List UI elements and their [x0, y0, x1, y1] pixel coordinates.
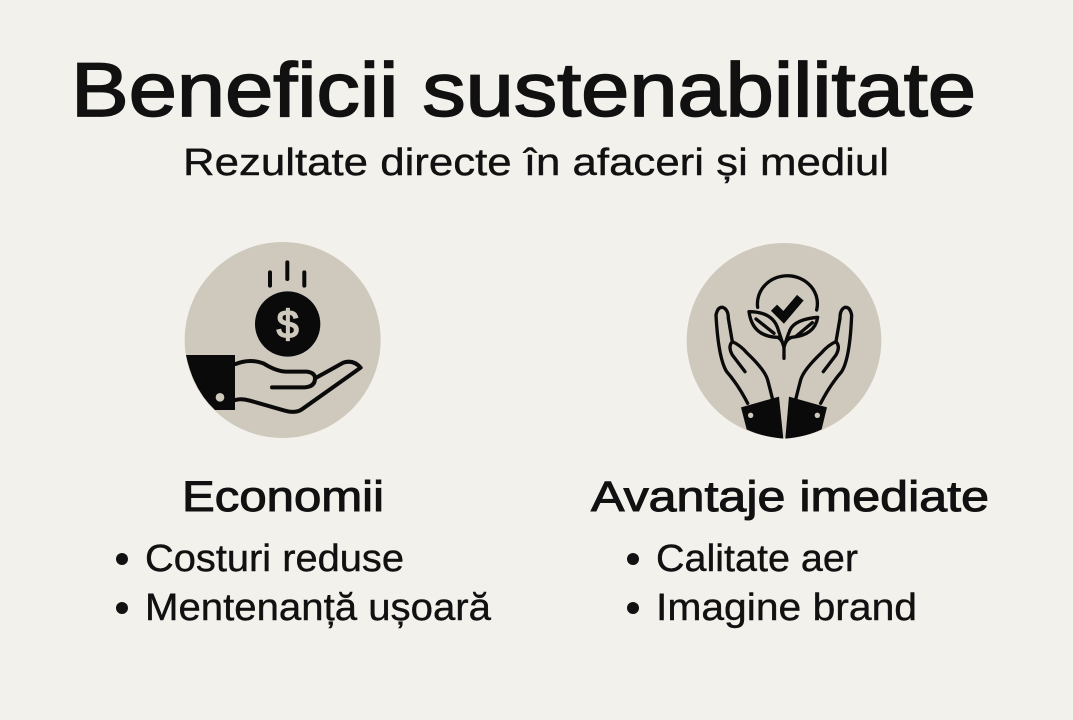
heading: Economii: Economii	[182, 473, 384, 521]
list: Economii benefits	[116, 538, 492, 629]
icon: hand receiving dollar coin: $	[277, 302, 299, 346]
list: Economii benefits: Costuri reduse	[145, 538, 404, 580]
subtitle: Rezultate directe în afaceri și mediul	[183, 142, 889, 184]
title: Beneficii sustenabilitate	[71, 48, 976, 133]
icon: hand receiving dollar coin	[185, 242, 381, 438]
list: Avantaje imediate benefits	[627, 538, 917, 629]
list: Avantaje imediate benefits: Imagine brand	[656, 587, 917, 629]
icon: hands holding plant with check	[687, 243, 881, 439]
list: Avantaje imediate benefits: Calitate aer	[656, 538, 858, 580]
heading: Avantaje imediate: Avantaje imediate	[591, 473, 989, 521]
list: Economii benefits: Mentenanță ușoară	[145, 587, 492, 629]
